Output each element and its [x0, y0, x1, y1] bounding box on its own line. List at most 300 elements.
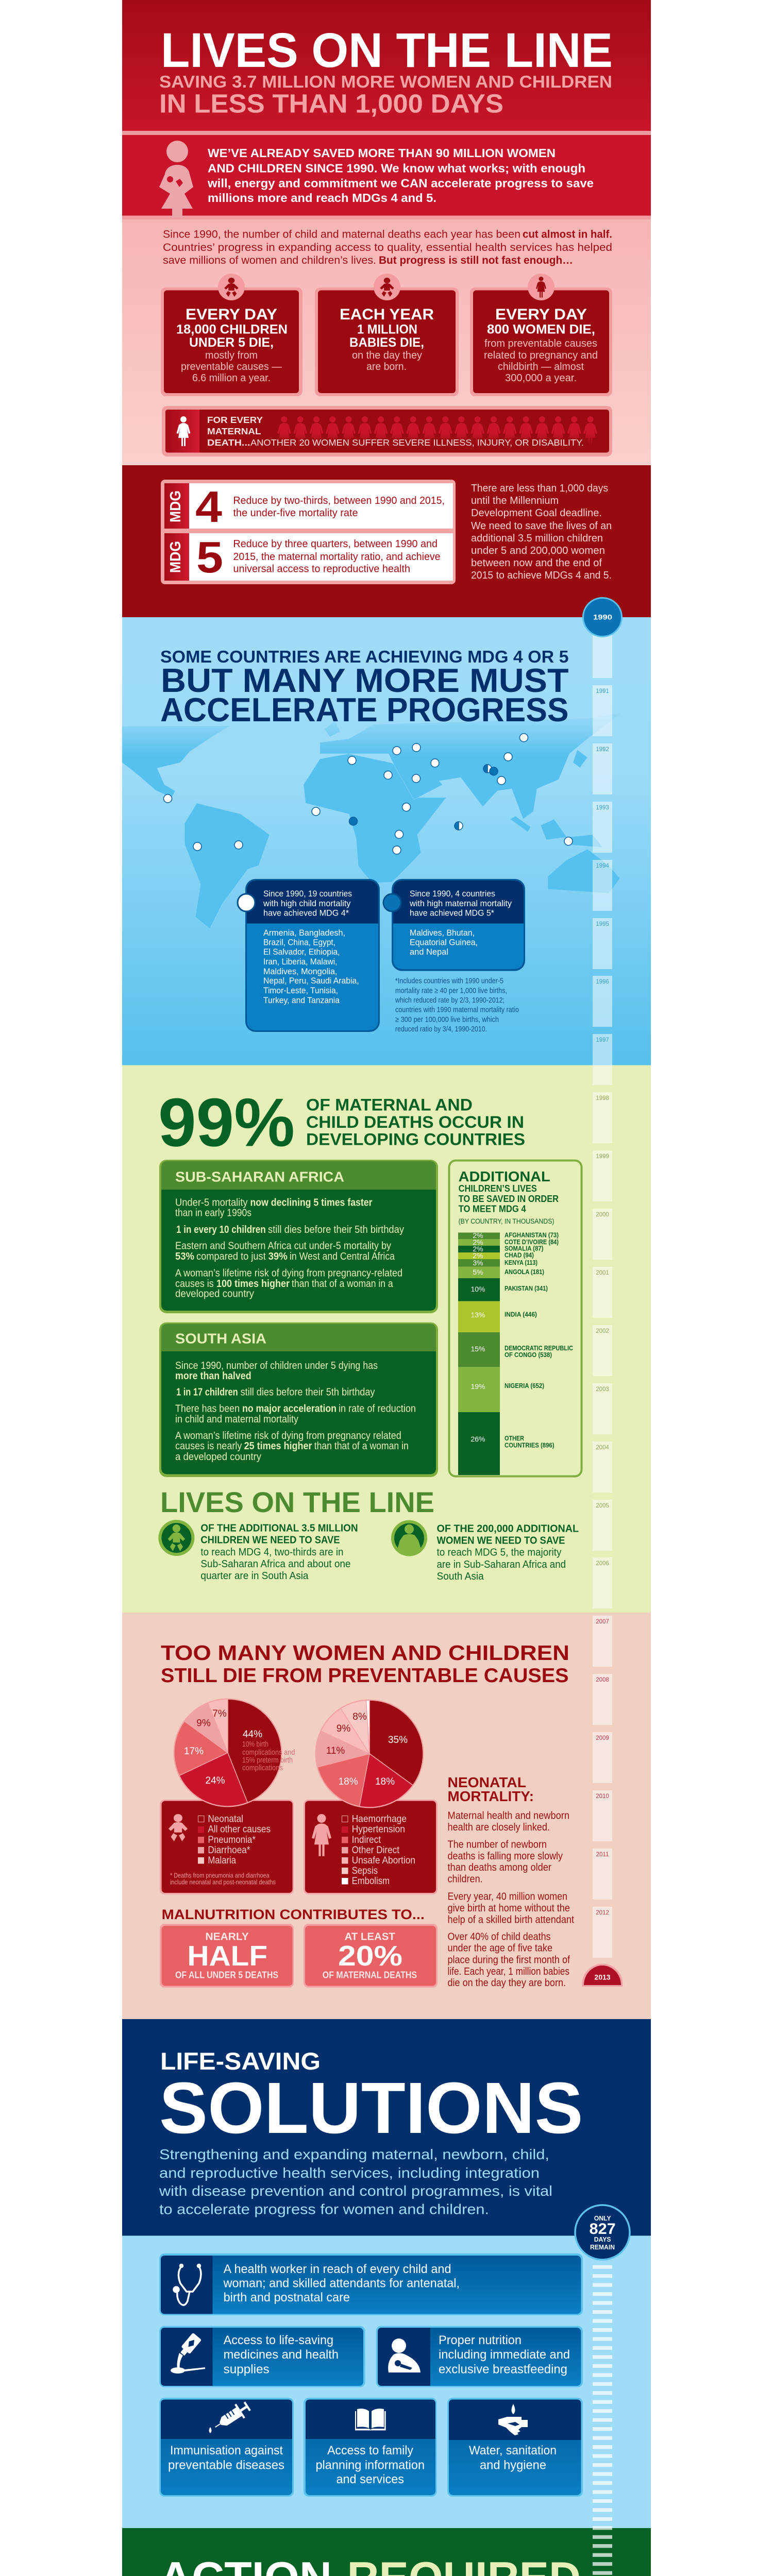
MDG 4 row [164, 483, 453, 532]
pie chart: child deaths: 15% preterm birth [242, 1756, 293, 1765]
card: 800 women: 300,000 a year. [505, 372, 577, 384]
women to save text: South Asia [437, 1571, 484, 1582]
legend: maternal causes: Sepsis [352, 1866, 378, 1876]
chart: additional children's lives stacked bar: COUNTRIES (896) [505, 1442, 554, 1449]
callout: MDG 5 countries: Equatorial Guinea, [410, 938, 478, 947]
neonatal mortality text: Every year, 40 million women [447, 1891, 567, 1902]
timeline marker: 827 days remain: DAYS [594, 2235, 611, 2243]
legend: maternal causes: Indirect [352, 1835, 381, 1845]
pie chart: maternal deaths: 8% [352, 1711, 367, 1722]
solutions paragraph: to accelerate progress for women and children. [159, 2201, 489, 2217]
card: health worker: A health worker in reach of every child and [224, 2262, 451, 2276]
timeline: 1990 to 2013 year bars: 2006 [596, 1561, 609, 1567]
subtitle line 1: SAVING 3.7 MILLION MORE WOMEN AND CHILDREN [159, 72, 612, 91]
solutions paragraph: and reproductive health services, including integration [159, 2165, 540, 2181]
icon: baby badge [158, 1520, 194, 1556]
chart: additional children's lives stacked bar: 2% [473, 1245, 483, 1253]
chart: additional children's lives stacked bar: 5% [473, 1268, 483, 1276]
intro text: AND CHILDREN SINCE 1990. We know what works; with enough [208, 162, 585, 175]
heading: SOME COUNTRIES ARE ACHIEVING MDG 4 OR 5 [160, 647, 569, 666]
chart: additional children's lives stacked bar: ADDITIONAL [459, 1168, 550, 1184]
card: south asia: There has been [175, 1403, 240, 1415]
legend: child causes [160, 1800, 294, 1894]
card: south asia [159, 1323, 438, 1477]
chart: additional children's lives stacked bar: OF CONGO (538) [505, 1351, 552, 1359]
timeline: 1990 to 2013 year bars: 2009 [596, 1735, 609, 1741]
chart: additional children's lives stacked bar: AFGHANISTAN (73) [505, 1232, 559, 1239]
banner text: DEATH... [207, 437, 250, 448]
pie chart: child deaths: 44% [243, 1729, 262, 1740]
neonatal mortality text: deaths is falling more slowly [447, 1851, 563, 1862]
legend: child causes: Neonatal [208, 1814, 243, 1825]
deadline text: until the Millennium [471, 495, 559, 506]
callout: MDG 4 countries: Since 1990, 19 countries [263, 889, 352, 899]
timeline marker: 827 days remain: REMAIN [590, 2243, 615, 2251]
card: south asia: 25 times higher [244, 1440, 312, 1452]
deadline text: 2015 to achieve MDGs 4 and 5. [471, 570, 612, 581]
chart: additional children's lives stacked bar: 13% [470, 1311, 485, 1319]
timeline: 1990 to 2013 year bars: 2002 [596, 1328, 609, 1334]
pie chart: child deaths: complications [242, 1764, 283, 1772]
card: nutrition [376, 2326, 583, 2387]
banner text: MATERNAL [207, 426, 261, 436]
legend: child causes: All other causes [208, 1824, 271, 1835]
timeline: remaining days dashes [593, 2265, 612, 2576]
timeline: 1990 to 2013 year bars: 2008 [596, 1677, 609, 1683]
timeline: 1990 to 2013 year bars: 1993 [596, 805, 609, 811]
chart: additional children's lives stacked bar: NIGERIA (652) [505, 1382, 544, 1389]
panel: progress not fast enough [122, 219, 651, 465]
callout: MDG 5 countries: have achieved MDG 5* [410, 908, 494, 918]
card: south asia: SOUTH ASIA [175, 1331, 266, 1347]
MDG 5 row: 5 [196, 533, 223, 582]
card: medicines: Access to life-saving [224, 2333, 333, 2347]
heading: lives on the line: LIVES ON THE LINE [160, 1486, 434, 1518]
neonatal mortality text: help of a skilled birth attendant [447, 1914, 574, 1925]
legend: maternal causes: Unsafe Abortion [352, 1855, 415, 1866]
timeline: 1990 to 2013 year bars: 1998 [596, 1095, 609, 1101]
panel: preventable causes [122, 1613, 651, 2019]
pie chart: maternal deaths: 1% [381, 1711, 396, 1722]
card: south asia: in rate of reduction [339, 1403, 416, 1415]
children to save text: quarter are in South Asia [200, 1570, 309, 1582]
panel: MDG goals [122, 465, 651, 617]
deadline text: Development Goal deadline. [471, 507, 602, 519]
progress paragraph: Countries’ progress in expanding access to quality, essential health services has helped [163, 241, 612, 253]
neonatal mortality text: MORTALITY: [447, 1788, 534, 1804]
card: sub-saharan africa: compared to just [196, 1251, 266, 1262]
deadline text: between now and the end of [471, 557, 602, 569]
card: south asia: more than halved [175, 1370, 251, 1382]
card: half of under 5 deaths: NEARLY [205, 1931, 249, 1943]
chart: additional children's lives stacked bar: ANGOLA (181) [505, 1268, 544, 1276]
pie chart: child deaths: 10% birth [242, 1740, 268, 1749]
card: 1 million babies: EACH YEAR [340, 306, 434, 323]
callout: MDG 4 countries [238, 879, 380, 1032]
neonatal mortality text: under the age of five take [447, 1943, 552, 1954]
card: half of under 5 deaths: OF ALL UNDER 5 DEATHS [175, 1970, 278, 1980]
card: south asia: in child and maternal mortality [175, 1414, 298, 1425]
timeline marker: 2013 [582, 1964, 623, 1987]
neonatal mortality text: life. Each year, 1 million babies [447, 1966, 569, 1977]
children to save text: to reach MDG 4, two-thirds are in [200, 1547, 343, 1558]
pie chart: child deaths: 17% [184, 1746, 204, 1757]
children to save text: CHILDREN WE NEED TO SAVE [200, 1535, 340, 1546]
card: 1 million babies: on the day they [352, 350, 422, 361]
card: 20 percent of maternal deaths: AT LEAST [345, 1931, 395, 1943]
card: south asia: a developed country [175, 1451, 261, 1463]
chart: additional children's lives stacked bar: INDIA (446) [505, 1311, 537, 1318]
callout: MDG 5 countries: with high maternal mortality [409, 899, 512, 908]
card: sub-saharan africa: A woman’s lifetime risk of dying from pregnancy-related [175, 1267, 402, 1279]
icon: woman badge [391, 1520, 427, 1556]
icon row: twenty women [277, 416, 597, 446]
legend: child causes: Malaria [208, 1855, 236, 1866]
timeline: 1990 to 2013 year bars: 2004 [596, 1445, 609, 1451]
card: 1 million babies: 1 MILLION [357, 323, 417, 337]
legend: maternal causes: Embolism [352, 1876, 390, 1887]
callout: MDG 4 countries: Armenia, Bangladesh, [263, 928, 345, 938]
chart: additional children's lives stacked bar: 2% [473, 1251, 483, 1260]
chart: additional children's lives stacked bar: COTE D’IVOIRE (84) [505, 1239, 559, 1246]
MDG 5 row: 2015, the maternal mortality ratio, and achieve [233, 551, 440, 563]
card: sub-saharan africa: than that of a woman in a [292, 1278, 393, 1290]
children to save text [200, 1522, 358, 1582]
card: medicines [159, 2326, 365, 2387]
card: sub-saharan africa: SUB-SAHARAN AFRICA [175, 1168, 344, 1185]
callout: MDG 5 countries [383, 879, 525, 971]
card: 18,000 children [161, 274, 303, 396]
map pins [164, 734, 573, 854]
callout: MDG 4 countries: have achieved MDG 4* [263, 908, 349, 918]
callout: MDG 4 countries: Maldives, Mongolia, [263, 967, 337, 976]
card: sub-saharan africa [159, 1160, 438, 1313]
card: nutrition: Proper nutrition [439, 2333, 522, 2347]
deadline text: under 5 and 200,000 women [471, 545, 605, 556]
icon: open book [355, 2409, 386, 2430]
MDG 4 row: MDG [167, 490, 184, 522]
panel: developing countries [122, 1065, 651, 1613]
heading small: LIFE-SAVING [160, 2047, 321, 2075]
card: nutrition: including immediate and [439, 2348, 570, 2362]
chart: additional children's lives stacked bar: TO BE SAVED IN ORDER [459, 1194, 559, 1204]
callout: MDG 4 countries: Nepal, Peru, Saudi Arabia, [263, 976, 359, 986]
chart: additional children's lives stacked bar [449, 1160, 581, 1477]
timeline: 1990 to 2013 year bars: 2001 [596, 1270, 609, 1276]
card: sub-saharan africa: causes is [175, 1278, 214, 1290]
legend: child causes: Diarrhoea* [208, 1845, 250, 1856]
footnote: reduced ratio by 3/4, 1990-2010. [395, 1025, 487, 1033]
callout: MDG 4 countries: Turkey, and Tanzania [263, 995, 340, 1005]
chart: additional children's lives stacked bar: CHAD (94) [505, 1252, 534, 1259]
chart: additional children's lives stacked bar: (BY COUNTRY, IN THOUSANDS) [459, 1217, 554, 1225]
women to save text: to reach MDG 5, the majority [437, 1547, 562, 1558]
timeline marker: 827 days remain [575, 2205, 630, 2260]
MDG 5 row: Reduce by three quarters, between 1990 and [233, 538, 438, 550]
pie chart: maternal deaths: 11% [326, 1745, 345, 1756]
card: south asia: A woman’s lifetime risk of dying from pregnancy related [175, 1430, 401, 1442]
MDG 4 row: the under-five mortality rate [233, 507, 358, 519]
callout: MDG 4 countries: El Salvador, Ethiopia, [263, 947, 340, 957]
timeline: 1990 to 2013 year bars: 2012 [596, 1910, 609, 1916]
card: immunisation [159, 2398, 294, 2497]
chart: additional children's lives stacked bar: 26% [470, 1435, 485, 1443]
banner text: FOR EVERY [207, 415, 263, 425]
children to save text: OF THE ADDITIONAL 3.5 MILLION [200, 1522, 358, 1534]
MDG 5 row: universal access to reproductive health [233, 564, 410, 575]
neonatal mortality text: Over 40% of child deaths [447, 1931, 550, 1943]
card: 800 women: EVERY DAY [495, 306, 587, 323]
progress paragraph: cut almost in half. [523, 228, 612, 241]
legend: child causes: include neonatal and post-neonatal deaths [170, 1878, 276, 1886]
timeline: 1990 to 2013 year bars: 1991 [596, 688, 609, 694]
callout: MDG 5 countries: Maldives, Bhutan, [410, 928, 475, 938]
card: half of under 5 deaths: HALF [187, 1940, 267, 1972]
callout: MDG 4 countries: Timor-Leste, Tunisia, [263, 986, 338, 995]
card: sub-saharan africa: Eastern and Southern Africa cut under-5 mortality by [175, 1241, 391, 1252]
world map [122, 714, 620, 929]
heading: TOO MANY WOMEN AND CHILDREN [161, 1641, 569, 1665]
card: 18,000 children: preventable causes — [181, 361, 282, 372]
heading [160, 647, 569, 728]
card: health worker: woman; and skilled attendants for antenatal, [223, 2276, 460, 2291]
icon: medicine bottle and spoon [171, 2333, 205, 2374]
solutions paragraph [159, 2146, 552, 2217]
heading: STILL DIE FROM PREVENTABLE CAUSES [161, 1665, 569, 1687]
timeline marker: 2013: 2013 [594, 1973, 611, 1981]
solutions paragraph: with disease prevention and control programmes, is vital [159, 2183, 552, 2199]
icon: breastfeeding mother [388, 2338, 421, 2372]
heading [159, 2553, 581, 2576]
card: 1 million babies: BABIES DIE, [349, 335, 424, 350]
women to save text: WOMEN WE NEED TO SAVE [437, 1535, 565, 1547]
pie chart: maternal deaths: 18% [375, 1776, 395, 1787]
neonatal mortality text: children. [447, 1873, 483, 1885]
card: sub-saharan africa: than in early 1990s [175, 1208, 251, 1219]
card: family planning: Access to family [327, 2444, 413, 2458]
timeline: 1990 to 2013 year bars: 1996 [596, 979, 609, 985]
card: south asia: still dies before their 5th birthday [241, 1387, 375, 1398]
MDG 5 row: MDG [167, 541, 184, 573]
chart: additional children's lives stacked bar: 3% [473, 1259, 483, 1267]
women to save text: are in Sub-Saharan Africa and [437, 1559, 566, 1570]
icon: water drop and hands [498, 2404, 528, 2435]
panel: solutions list [122, 2236, 651, 2528]
chart: additional children's lives stacked bar: PAKISTAN (341) [505, 1285, 548, 1292]
chart: additional children's lives stacked bar: DEMOCRATIC REPUBLIC [505, 1345, 573, 1352]
card: water and sanitation: Water, sanitation [469, 2444, 557, 2458]
card: 800 women [470, 274, 612, 396]
card: sub-saharan africa: now declining 5 times faster [250, 1197, 373, 1209]
card: family planning: planning information [315, 2458, 425, 2472]
chart: additional children's lives stacked bar: CHILDREN’S LIVES [459, 1183, 537, 1194]
progress paragraph: save millions of women and children’s lives. [163, 254, 376, 266]
card: sub-saharan africa: 1 in every 10 children [176, 1224, 266, 1235]
footnote: *Includes countries with 1990 under-5 [395, 977, 503, 985]
footnote: ≥ 300 per 100,000 live births, which [395, 1015, 499, 1024]
legend: child causes: Pneumonia* [208, 1835, 256, 1845]
neonatal mortality text: than deaths among older [447, 1862, 551, 1873]
timeline: 1990 to 2013 year bars: 1994 [596, 863, 609, 869]
pie chart: maternal deaths: 9% [337, 1723, 350, 1734]
chart: additional children's lives stacked bar: TO MEET MDG 4 [459, 1204, 526, 1214]
footnote: mortality rate ≥ 40 per 1,000 live births, [395, 986, 507, 995]
timeline: 1990 to 2013 year bars: 1999 [596, 1154, 609, 1160]
card: 1 million babies [315, 274, 459, 396]
card: south asia: causes is nearly [175, 1440, 242, 1452]
timeline: 1990 to 2013 year bars: 2003 [596, 1386, 609, 1393]
callout: MDG 5 countries: Since 1990, 4 countries [410, 889, 495, 899]
intro text: will, energy and commitment we CAN accelerate progress to save [207, 176, 594, 190]
card: 800 women: from preventable causes [484, 338, 597, 349]
card: 800 women: 800 WOMEN DIE, [487, 323, 595, 337]
card: 18,000 children: EVERY DAY [186, 306, 277, 323]
neonatal mortality text: die on the day they are born. [447, 1977, 566, 1989]
section: hero title [122, 0, 651, 135]
legend: maternal causes: Haemorrhage [352, 1814, 407, 1825]
footnote: countries with 1990 maternal mortality ratio [395, 1006, 519, 1014]
MDG 4 row: 4 [195, 483, 222, 532]
card: sub-saharan africa: in West and Central Africa [290, 1251, 395, 1262]
statistic caption [306, 1095, 525, 1149]
panel: countries progress map [122, 617, 651, 1065]
timeline marker: 1990 [583, 598, 621, 637]
pie chart: maternal deaths [315, 1699, 424, 1808]
card: sub-saharan africa: still dies before their 5th birthday [268, 1224, 404, 1235]
card: south asia: no major acceleration [242, 1403, 337, 1415]
card: sub-saharan africa: developed country [175, 1289, 254, 1300]
women to save text: OF THE 200,000 ADDITIONAL [437, 1523, 579, 1534]
card: sub-saharan africa: 53% [175, 1251, 194, 1262]
banner text: ANOTHER 20 WOMEN SUFFER SEVERE ILLNESS, INJURY, OR DISABILITY. [250, 437, 584, 448]
pie chart: child deaths: complications and [242, 1748, 295, 1757]
progress paragraph: But progress is still not fast enough… [379, 254, 573, 266]
heading: BUT MANY MORE MUST [161, 662, 569, 699]
statistic caption: OF MATERNAL AND [306, 1095, 473, 1114]
card: south asia: 1 in 17 children [176, 1387, 238, 1398]
icon: stethoscope [174, 2265, 201, 2305]
timeline: 1990 to 2013 year bars: 2005 [596, 1503, 609, 1509]
deadline text: There are less than 1,000 days [471, 483, 608, 494]
card: medicines: supplies [224, 2363, 270, 2377]
statistic caption: DEVELOPING COUNTRIES [306, 1130, 525, 1149]
callout: MDG 4 countries: with high child mortality [263, 899, 351, 908]
card: 1 million babies: are born. [366, 361, 407, 372]
pie chart: child deaths [173, 1698, 295, 1807]
chart: additional children's lives stacked bar: 10% [470, 1285, 485, 1293]
neonatal mortality text: place during the first month of [447, 1955, 570, 1966]
deadline text [471, 483, 612, 581]
icon: mother and baby [159, 141, 193, 218]
MDG 4 row: Reduce by two-thirds, between 1990 and 2015, [233, 495, 445, 506]
big statistic: 99% [158, 1084, 295, 1161]
timeline: 1990 to 2013 year bars: 2000 [596, 1212, 609, 1218]
intro text: WE’VE ALREADY SAVED MORE THAN 90 MILLION WOMEN [208, 146, 556, 160]
neonatal mortality text [447, 1774, 574, 1989]
banner text [207, 415, 584, 448]
card: 18,000 children: 18,000 CHILDREN [176, 323, 288, 337]
callout: MDG 4 countries: Iran, Liberia, Malawi, [263, 957, 337, 967]
card: 20 percent of maternal deaths: 20% [338, 1940, 402, 1972]
card: immunisation: Immunisation against [170, 2444, 283, 2458]
card: nutrition: exclusive breastfeeding [439, 2363, 567, 2377]
callout: MDG 4 countries: Brazil, China, Egypt, [263, 938, 335, 947]
neonatal mortality text: Maternal health and newborn [447, 1810, 569, 1822]
statistic caption: CHILD DEATHS OCCUR IN [306, 1113, 524, 1131]
intro text [207, 146, 594, 205]
timeline: 1990 to 2013 year bars: 1992 [596, 747, 609, 753]
timeline marker: 827 days remain: 827 [590, 2221, 616, 2238]
legend: maternal causes: Hypertension [352, 1824, 405, 1835]
heading [161, 1641, 569, 1687]
callout: MDG 5 countries: and Nepal [410, 947, 448, 957]
legend: child causes: * Deaths from pneumonia and diarrhoea [170, 1871, 270, 1879]
legend: maternal causes [304, 1800, 438, 1894]
pie chart: child deaths: 7% [212, 1708, 227, 1719]
card: 18,000 children: 6.6 million a year. [192, 372, 271, 384]
footnote: which reduced rate by 2/3, 1990-2012; [395, 996, 505, 1005]
card: medicines: medicines and health [224, 2348, 339, 2362]
card: water and sanitation: and hygiene [480, 2458, 546, 2472]
panel: life-saving solutions header [122, 2019, 651, 2236]
title: LIVES ON THE LINE [161, 23, 613, 78]
heading: malnutrition: MALNUTRITION CONTRIBUTES TO... [162, 1907, 425, 1922]
chart: additional children's lives stacked bar: 19% [470, 1382, 485, 1391]
pie chart: child deaths: 9% [196, 1718, 211, 1729]
heading: ACCELERATE PROGRESS [160, 691, 569, 728]
card: south asia: than that of a woman in [314, 1440, 409, 1452]
children to save text: Sub-Saharan Africa and about one [200, 1558, 350, 1570]
card: immunisation: preventable diseases [168, 2458, 284, 2472]
card: sub-saharan africa: 100 times higher [216, 1278, 290, 1290]
heading large: SOLUTIONS [159, 2067, 583, 2148]
timeline: 1990 to 2013 year bars: 2007 [596, 1619, 609, 1625]
card: sub-saharan africa: Under-5 mortality [175, 1197, 248, 1209]
banner: for every maternal death [162, 406, 612, 456]
timeline marker: 1990: 1990 [593, 613, 612, 621]
deadline text: additional 3.5 million children [471, 533, 603, 544]
card: sub-saharan africa: 39% [268, 1251, 288, 1262]
deadline text: We need to save the lives of an [471, 520, 612, 532]
card: 18,000 children: mostly from [205, 350, 258, 361]
chart: additional children's lives stacked bar: OTHER [505, 1435, 524, 1442]
legend: maternal causes: Other Direct [352, 1845, 400, 1856]
card: 20 percent of maternal deaths: OF MATERNAL DEATHS [323, 1970, 417, 1980]
card: half of under 5 deaths [160, 1924, 294, 1988]
subtitle line 2: IN LESS THAN 1,000 DAYS [159, 89, 503, 118]
solutions paragraph: Strengthening and expanding maternal, newborn, child, [159, 2146, 549, 2162]
card: south asia: Since 1990, number of children under 5 dying has [175, 1360, 378, 1371]
neonatal mortality text: health are closely linked. [447, 1822, 550, 1833]
pie chart: child deaths: 24% [205, 1775, 225, 1786]
card: 18,000 children: UNDER 5 DIE, [189, 335, 274, 350]
icon: woman [176, 416, 191, 446]
pie chart: maternal deaths: 35% [388, 1735, 408, 1745]
card: 20 percent of maternal deaths [304, 1924, 438, 1988]
timeline: 1990 to 2013 year bars: 1995 [596, 921, 609, 927]
timeline: 1990 to 2013 year bars: 1997 [596, 1037, 609, 1043]
chart: additional children's lives stacked bar: 2% [473, 1231, 483, 1240]
chart: additional children's lives stacked bar: 2% [473, 1238, 483, 1246]
progress paragraph: Since 1990, the number of child and maternal deaths each year has been [163, 228, 520, 241]
card: water and sanitation [447, 2398, 583, 2497]
card: family planning: and services [336, 2472, 404, 2486]
chart: additional children's lives stacked bar: 15% [470, 1345, 485, 1353]
progress paragraph [163, 228, 612, 266]
footnote [395, 977, 519, 1033]
timeline: 1990 to 2013 year bars: 2011 [596, 1852, 609, 1858]
icon: syringe [209, 2399, 253, 2434]
